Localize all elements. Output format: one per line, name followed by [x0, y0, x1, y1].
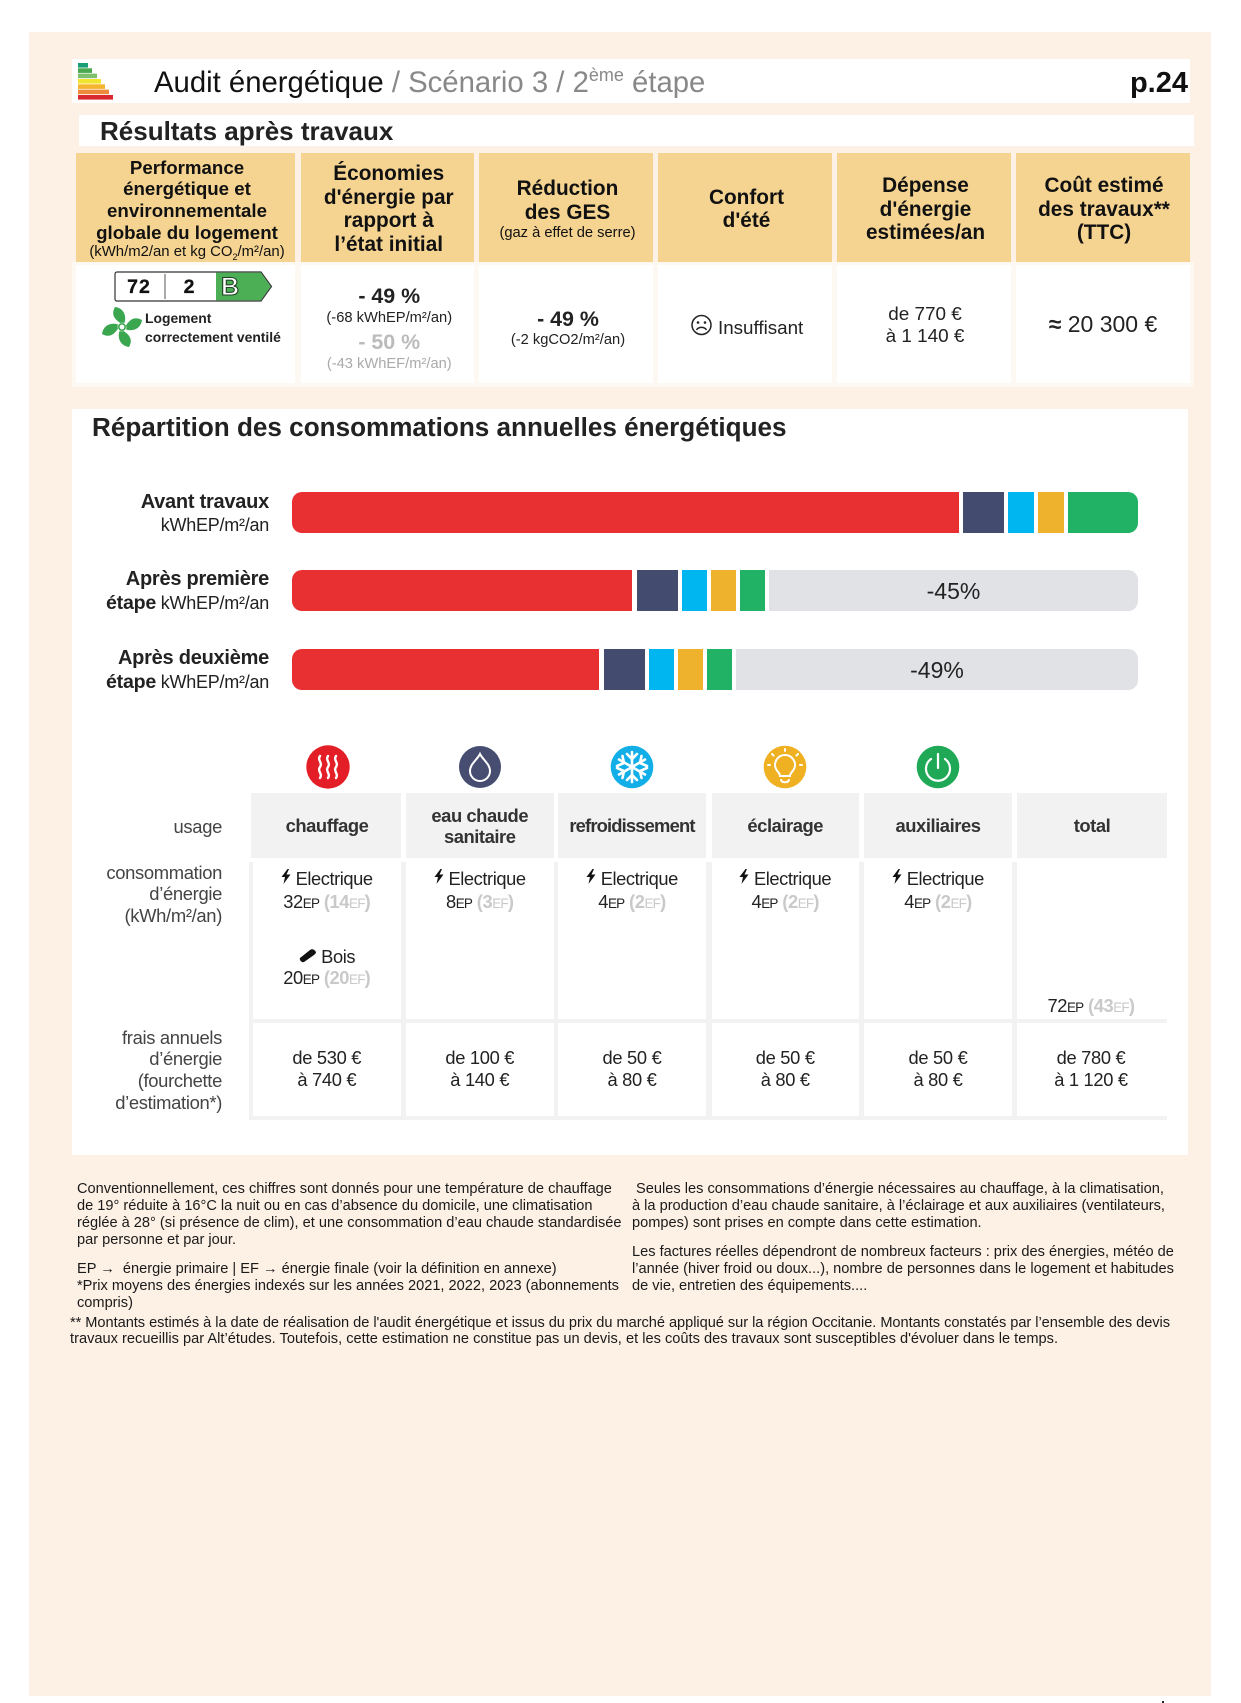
footnote: left column: *Prix moyens des énergies indexés sur les années 2021, 2022, 2023 (abonnements: [77, 1278, 619, 1294]
row label: frais: [115, 1026, 222, 1113]
column header: chauffage: chauffage: [286, 815, 368, 836]
icon: ventilation fan: [102, 307, 142, 347]
cell: économies d'énergie: - 49 %: [358, 284, 420, 308]
bar row: après première étape: Après première: [126, 568, 269, 590]
column header: auxiliaires: auxiliaires: [895, 815, 981, 836]
row label: consommation: consommation: [106, 862, 222, 882]
cell: réduction GES: - 49 %: [537, 307, 599, 331]
column header: eau chaude sanitaire: sanitaire: [444, 826, 516, 846]
header bar: [72, 59, 1190, 103]
cell: éclairage frais: à 80 €: [761, 1069, 810, 1090]
ventilation text: correctement ventilé: [145, 329, 281, 345]
footnote: left column: [77, 1181, 622, 1311]
column header: éclairage: [712, 793, 859, 858]
footnote: right column: Seules les consommations d’énergie nécessaires au chauffage, à la climatisation,: [636, 1181, 1164, 1197]
ventilation text: [145, 310, 281, 345]
cell: chauffage frais: [253, 1023, 401, 1116]
row label: consommation: (kWh/m²/an): [124, 905, 222, 926]
cell: refroidissement consommation: 4EP (2EF): [598, 890, 666, 912]
bar row: avant travaux: kWhEP/m²/an: [161, 515, 269, 535]
column header: dépense: estimées/an: [866, 221, 985, 244]
column header: performance: Performance: [130, 156, 244, 178]
footnote: right column: l’année (hiver froid ou doux...), nombre de personnes dans le logement et habitudes: [632, 1261, 1174, 1277]
column header: réduction GES: des GES: [525, 201, 610, 224]
footnote: left column: de 19° réduite à 16°C la nuit ou en cas d’absence du domicile, une climatisation: [77, 1198, 592, 1214]
cell: total frais: de 780 €: [1057, 1047, 1125, 1068]
reduction label -45%: -45%: [927, 578, 980, 604]
cell: économies d'énergie: - 50 %: [358, 330, 420, 354]
energy label badge: [114, 271, 272, 302]
footnote: montants estimés: [70, 1314, 1170, 1347]
bar row: avant travaux: Avant travaux: [141, 491, 269, 513]
title: Audit énergétique / Scénario 3 / 2ème étape: [154, 65, 705, 99]
column header: total: total: [1074, 815, 1110, 836]
icon: éclairage: [764, 746, 806, 788]
cell: auxiliaires consommation: 4EP (2EF): [904, 890, 972, 912]
footnote: left column: par personne et par jour.: [77, 1232, 236, 1248]
table: usage, consommation, frais: [106, 793, 1167, 1120]
footnote: right column: pompes) sont prises en compte dans cette estimation.: [632, 1215, 982, 1231]
icon: chauffage: [306, 745, 350, 789]
column header: coût: Coût estimé: [1044, 174, 1164, 197]
row label: frais: d’estimation*): [115, 1092, 222, 1113]
cell: refroidissement frais: de 50 €: [603, 1047, 661, 1068]
row label: frais: frais annuels: [122, 1026, 222, 1048]
cell: économies d'énergie: [300, 265, 474, 383]
cell: confort d'été: [658, 265, 832, 383]
row label: consommation: [106, 862, 222, 926]
column header: confort d'été: d'été: [723, 209, 770, 232]
cell: éclairage frais: de 50 €: [756, 1047, 815, 1068]
column header: réduction GES: (gaz à effet de serre): [499, 225, 636, 241]
cell: auxiliaires consommation: [864, 862, 1012, 1019]
cell: eau chaude consommation: [406, 862, 554, 1019]
column header: économies: d'énergie par: [324, 186, 454, 209]
cell: total consommation: 72EP (43EF): [1047, 994, 1135, 1016]
energy label badge: 2: [184, 276, 195, 298]
cell: auxiliaires frais: à 80 €: [913, 1069, 963, 1090]
bar row: après première étape: étape kWhEP/m²/an: [106, 592, 269, 614]
reduction label -49%: [736, 649, 1138, 690]
column header: performance: environnementale: [107, 200, 267, 221]
footnote: right column: [632, 1181, 1174, 1294]
cell: eau chaude frais: [406, 1023, 554, 1116]
heading: Répartition des consommations annuelles énergétiques: [92, 412, 787, 442]
ventilation text: Logement: [145, 310, 211, 326]
footnote: left column: Conventionnellement, ces chiffres sont donnés pour une température de chauffage: [77, 1181, 612, 1197]
column header: économies: [300, 153, 474, 262]
icon: refroidissement: [610, 746, 654, 788]
row label: consommation: d’énergie: [149, 883, 222, 904]
column header: coût: [1016, 153, 1190, 262]
column header: refroidissement: refroidissement: [569, 815, 695, 836]
cell: éclairage frais: [712, 1023, 859, 1116]
cell: eau chaude consommation: Electrique: [449, 868, 526, 889]
column header: économies: Économies: [333, 162, 444, 185]
column header: économies: rapport à: [344, 209, 434, 232]
cell: chauffage consommation: 32EP (14EF): [283, 890, 370, 912]
column header: réduction GES: Réduction: [517, 177, 618, 200]
cell: économies d'énergie: (-68 kWhEP/m²/an): [326, 310, 452, 326]
cell: chauffage consommation: Bois: [321, 946, 355, 967]
row label: frais: d’énergie: [149, 1048, 222, 1069]
bar row: après deuxième étape: étape kWhEP/m²/an: [106, 671, 269, 693]
cell: dépense: de 770 €: [888, 304, 962, 325]
cell: total consommation: [1017, 862, 1167, 1019]
cell: éclairage consommation: 4EP (2EF): [751, 890, 819, 912]
cell: total frais: [1017, 1023, 1167, 1116]
column header: eau chaude sanitaire: [406, 793, 554, 858]
cell: chauffage frais: à 740 €: [297, 1069, 356, 1090]
cell: refroidissement consommation: [558, 862, 706, 1019]
cell: total frais: à 1 120 €: [1054, 1069, 1128, 1090]
bar row: après deuxième étape: Après deuxième: [118, 647, 269, 669]
cell: coût: ≈ 20 300 €: [1049, 311, 1157, 337]
column header: total: [1017, 793, 1167, 858]
heading: résultats après travaux: Résultats après travaux: [100, 116, 393, 146]
row label: usage: usage: [174, 816, 222, 837]
panel: results table: [76, 153, 1190, 383]
cell: refroidissement frais: à 80 €: [607, 1069, 657, 1090]
reduction label -45%: [769, 570, 1138, 611]
footnote: right column: de vie, entretien des équipements....: [632, 1278, 867, 1294]
column header: refroidissement: [558, 793, 706, 858]
cell: éclairage consommation: Electrique: [754, 868, 831, 889]
cell: auxiliaires frais: de 50 €: [909, 1047, 967, 1068]
icon: eau chaude: [459, 746, 501, 788]
footnote: montants estimés: ** Montants estimés à la date de réalisation de l'audit énergétique et issus du prix du marché appliqué sur la région Occitanie. Montants constatés par l’ensemble des devis: [70, 1314, 1170, 1330]
cell: économies d'énergie: (-43 kWhEF/m²/an): [327, 356, 452, 372]
cell: energy label: [76, 265, 295, 383]
cell: dépense: à 1 140 €: [886, 326, 964, 347]
footnote: montants estimés: travaux recueillis par Alt’études. Toutefois, cette estimation ne constitue pas un devis, et les coûts des travaux sont susceptibles d'évoluer dans le temps.: [70, 1331, 1058, 1347]
footnote: right column: à la production d’eau chaude sanitaire, à l’éclairage et aux auxiliaires (ventilateurs,: [632, 1198, 1165, 1214]
energy label badge: 72: [127, 276, 151, 298]
cell: chauffage consommation: Electrique: [296, 868, 373, 889]
column header: confort d'été: Confort: [709, 186, 784, 208]
bar row: avant travaux: [141, 491, 1138, 535]
footnote: left column: réglée à 28° (si présence de clim), et une consommation d’eau chaude standardisée: [77, 1215, 622, 1231]
panel: répartition des consommations: [72, 409, 1188, 1155]
energy label badge: B: [221, 273, 239, 301]
icon: sad face: [691, 314, 712, 336]
column header: coût: des travaux**: [1038, 198, 1170, 221]
cell: auxiliaires frais: [864, 1023, 1012, 1116]
cell: réduction GES: [479, 265, 653, 383]
page number: p.24: [1130, 67, 1188, 99]
cell: coût: [1016, 265, 1190, 383]
column header: dépense: Dépense: [882, 174, 969, 197]
cell: chauffage consommation: [253, 862, 401, 1019]
column header: économies: l’état initial: [334, 233, 443, 256]
cell: refroidissement consommation: Electrique: [601, 868, 678, 889]
column header: eau chaude sanitaire: eau chaude: [431, 804, 528, 826]
cell: chauffage frais: de 530 €: [292, 1047, 361, 1068]
cell: chauffage consommation: 20EP (20EF): [283, 967, 370, 988]
icon: auxiliaires: [916, 746, 960, 788]
cell: réduction GES: (-2 kgCO2/m²/an): [511, 332, 625, 348]
icon: energy rating scale: [78, 63, 113, 100]
page edge mark: [1162, 1701, 1164, 1703]
column header: dépense: d'énergie: [880, 198, 971, 221]
row label: frais: (fourchette: [138, 1070, 222, 1091]
column header: performance: globale du logement: [96, 222, 278, 243]
column header: réduction GES: [479, 153, 653, 262]
table grid: [249, 862, 1167, 1120]
cell: auxiliaires consommation: Electrique: [907, 868, 984, 889]
footnote: left column: EP → énergie primaire | EF → énergie finale (voir la définition en annexe): [77, 1261, 557, 1277]
column header: auxiliaires: [864, 793, 1012, 858]
bar row: après deuxième étape: [106, 647, 1138, 693]
column header: performance: énergétique et: [123, 178, 251, 199]
column header: performance: (kWh/m2/an et kg CO2/m²/an): [89, 244, 285, 262]
column header: confort d'été: [658, 153, 832, 262]
cell: refroidissement frais: [558, 1023, 706, 1116]
column header: éclairage: éclairage: [747, 815, 823, 836]
cell: confort d'été: Insuffisant: [718, 317, 803, 338]
heading: résultats après travaux: [79, 115, 1194, 146]
column header: dépense: [837, 153, 1011, 262]
cell: eau chaude consommation: 8EP (3EF): [446, 890, 514, 912]
column header: chauffage: [251, 793, 401, 858]
reduction label -49%: -49%: [910, 657, 964, 683]
cell: eau chaude frais: de 100 €: [445, 1047, 514, 1068]
footnote: right column: Les factures réelles dépendront de nombreux facteurs : prix des énergies, météo de: [632, 1244, 1174, 1260]
column header: coût: (TTC): [1077, 221, 1131, 244]
column header: performance: [76, 153, 295, 262]
footnote: left column: compris): [77, 1295, 133, 1311]
cell: éclairage consommation: [712, 862, 859, 1019]
bar row: après première étape: [106, 568, 1138, 614]
cell: dépense: [837, 265, 1011, 383]
cell: eau chaude frais: à 140 €: [450, 1069, 509, 1090]
